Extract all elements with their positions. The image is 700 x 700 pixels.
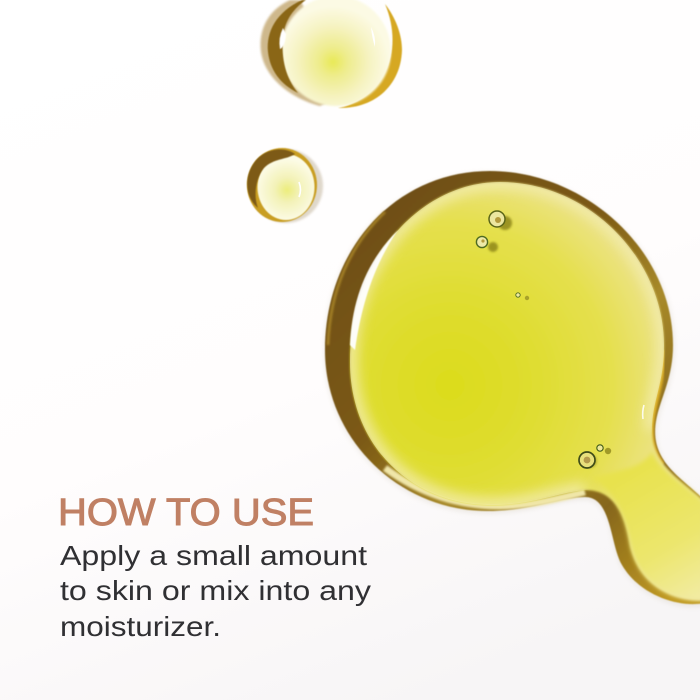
puddle pale inner edge [350,182,664,505]
bubble tiny [516,293,529,300]
puddle highlight [350,230,398,350]
small drop body [258,154,314,220]
small drop gold ring [247,148,317,222]
drop highlight left [279,28,286,49]
body text: Apply a small amount [60,540,367,571]
puddle small highlight right [643,405,644,419]
drop gold crescent [338,4,402,108]
puddle shadow [324,172,700,607]
bubble lower small [597,445,611,454]
body text: to skin or mix into any [60,575,371,606]
small drop dark crescent [247,150,295,208]
drop body [281,0,391,106]
puddle neck body [590,452,700,600]
small drop highlight [299,182,300,197]
bubble top [489,211,512,230]
puddle bottom pale edge [385,468,585,506]
heading: HOW TO USE [58,492,314,534]
bubble lower [579,452,597,468]
drop highlight right [371,27,375,47]
body text [60,540,371,642]
large oil puddle [324,171,700,607]
oil drop top [260,0,402,108]
small drop shadow [249,149,323,223]
drop shadow [260,0,350,106]
body text: moisturizer. [60,611,221,642]
puddle rim outer lighter edge [328,212,385,345]
drop dark crescent [268,0,306,93]
puddle oil body [350,182,700,600]
puddle gold glow, lower right rim [651,350,662,465]
puddle rim [325,171,700,604]
oil drop small [247,148,323,223]
bubble second [476,236,498,252]
